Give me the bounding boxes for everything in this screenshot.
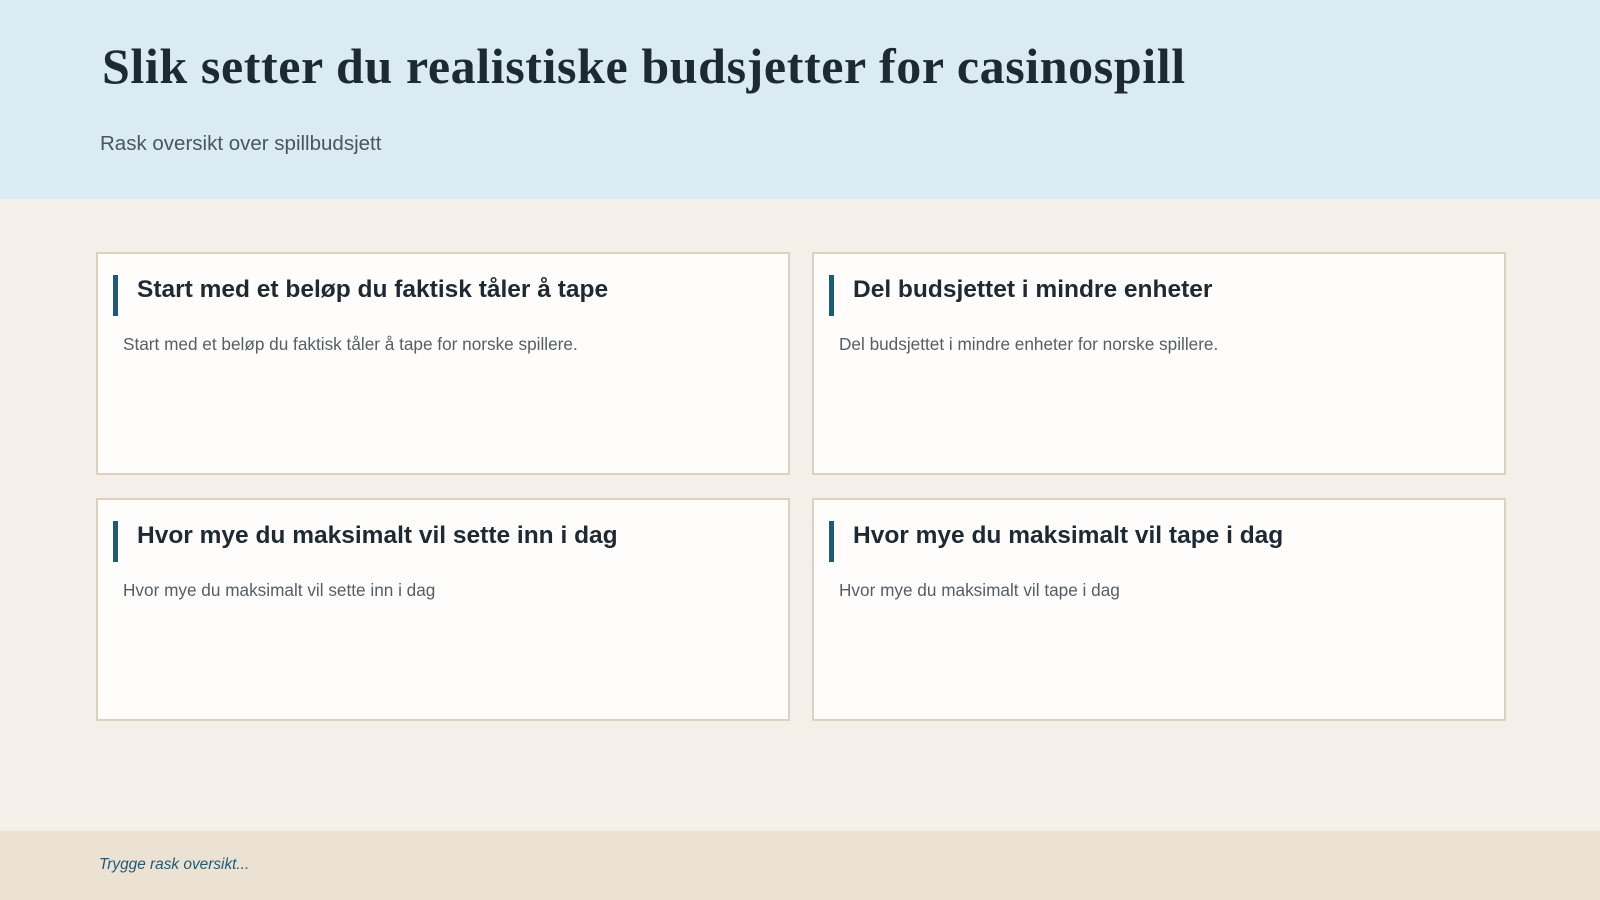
subtitle: Rask oversikt over spillbudsjett: [100, 132, 381, 155]
accent bar: [113, 521, 118, 562]
panel: tape i dag: [812, 498, 1506, 721]
accent bar: [829, 275, 834, 316]
panel: start med et beløp: [96, 252, 790, 475]
text block: Hvor mye du maksimalt vil tape i dag: [839, 580, 1120, 600]
text block: Del budsjettet i mindre enheter for norske spillere.: [839, 334, 1218, 354]
header band: [0, 0, 1600, 199]
panel: del budsjettet: [812, 252, 1506, 475]
heading: Del budsjettet i mindre enheter: [853, 276, 1212, 303]
heading: Hvor mye du maksimalt vil tape i dag: [853, 522, 1283, 549]
panel: sette inn i dag: [96, 498, 790, 721]
text block: Hvor mye du maksimalt vil sette inn i dag: [123, 580, 435, 600]
heading: Hvor mye du maksimalt vil sette inn i dag: [137, 522, 618, 549]
text block: Start med et beløp du faktisk tåler å tape for norske spillere.: [123, 334, 578, 354]
footer: [0, 831, 1600, 900]
heading: Start med et beløp du faktisk tåler å tape: [137, 276, 608, 303]
accent bar: [829, 521, 834, 562]
footer text: Trygge rask oversikt...: [99, 856, 249, 873]
accent bar: [113, 275, 118, 316]
title: Slik setter du realistiske budsjetter for casinospill: [102, 38, 1186, 94]
